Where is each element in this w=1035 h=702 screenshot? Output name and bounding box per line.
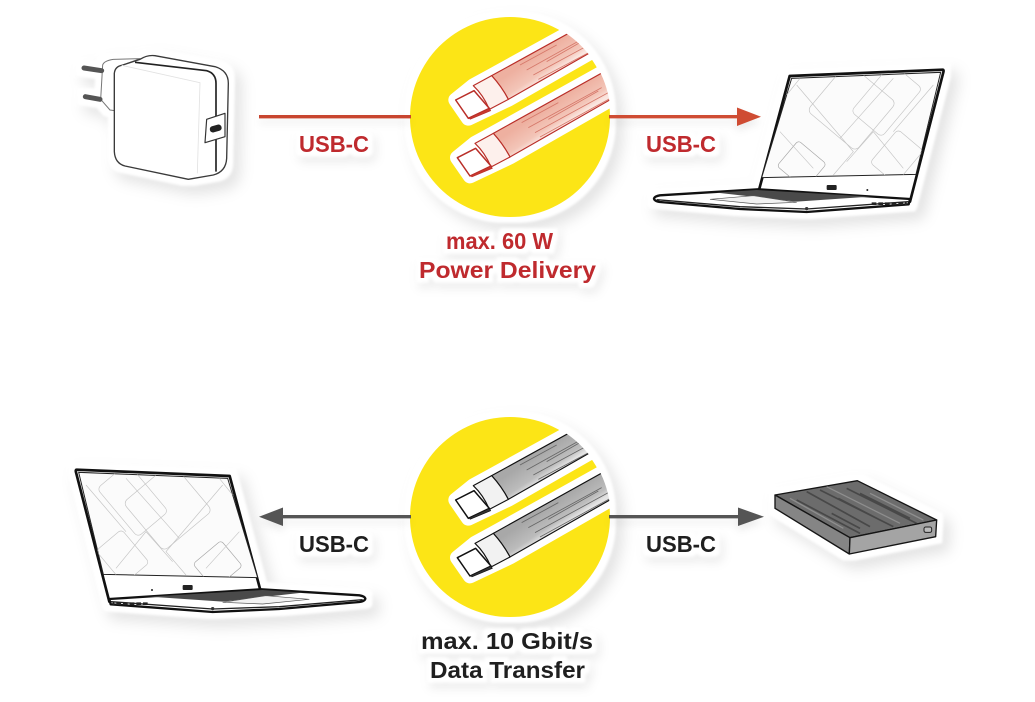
yellow disc — [410, 17, 610, 217]
label: USB-C right: USB-C — [646, 531, 716, 557]
laptop base — [109, 589, 365, 612]
label: USB-C left: USB-C — [299, 131, 369, 157]
upper grey cable — [456, 423, 613, 519]
laptop lid — [759, 70, 944, 202]
arrow: cable to laptop — [609, 108, 761, 126]
panel: data transfer — [76, 417, 937, 683]
arrow line: charger to cable — [259, 115, 411, 118]
lower grey cable — [457, 469, 628, 577]
icon: external hard drive — [775, 481, 937, 554]
yellow disc — [410, 417, 610, 617]
heading: max. 10 Gbit/s Data Transfer: Data Transfer — [430, 657, 585, 683]
icon: USB-C charger — [84, 55, 228, 179]
heading: max. 60 W Power Delivery: Power Delivery — [419, 257, 596, 283]
label: USB-C left: USB-C — [299, 531, 369, 557]
arrow: cable to laptop — [259, 508, 411, 526]
arrow: cable to drive — [609, 508, 764, 526]
icon: laptop receiving power — [654, 62, 944, 212]
heading: max. 10 Gbit/s Data Transfer: max. 10 Gbit/s — [421, 628, 593, 654]
upper red cable — [456, 23, 613, 119]
icon: two red USB-C connectors — [456, 23, 628, 177]
laptop base — [654, 189, 910, 212]
laptop lid — [76, 470, 260, 602]
lower red cable — [457, 69, 628, 177]
heading: max. 60 W Power Delivery: max. 60 W — [446, 228, 553, 254]
icon: two grey USB-C connectors — [456, 423, 628, 577]
icon: yellow circle with grey cables — [410, 417, 628, 617]
icon: yellow circle with red cables — [410, 17, 628, 217]
heading: max. 10 Gbit/s Data Transfer — [421, 628, 593, 683]
heading: max. 60 W Power Delivery — [419, 228, 596, 283]
panel: power delivery — [84, 17, 944, 283]
label: USB-C right: USB-C — [646, 131, 716, 157]
icon: laptop — [76, 462, 365, 612]
